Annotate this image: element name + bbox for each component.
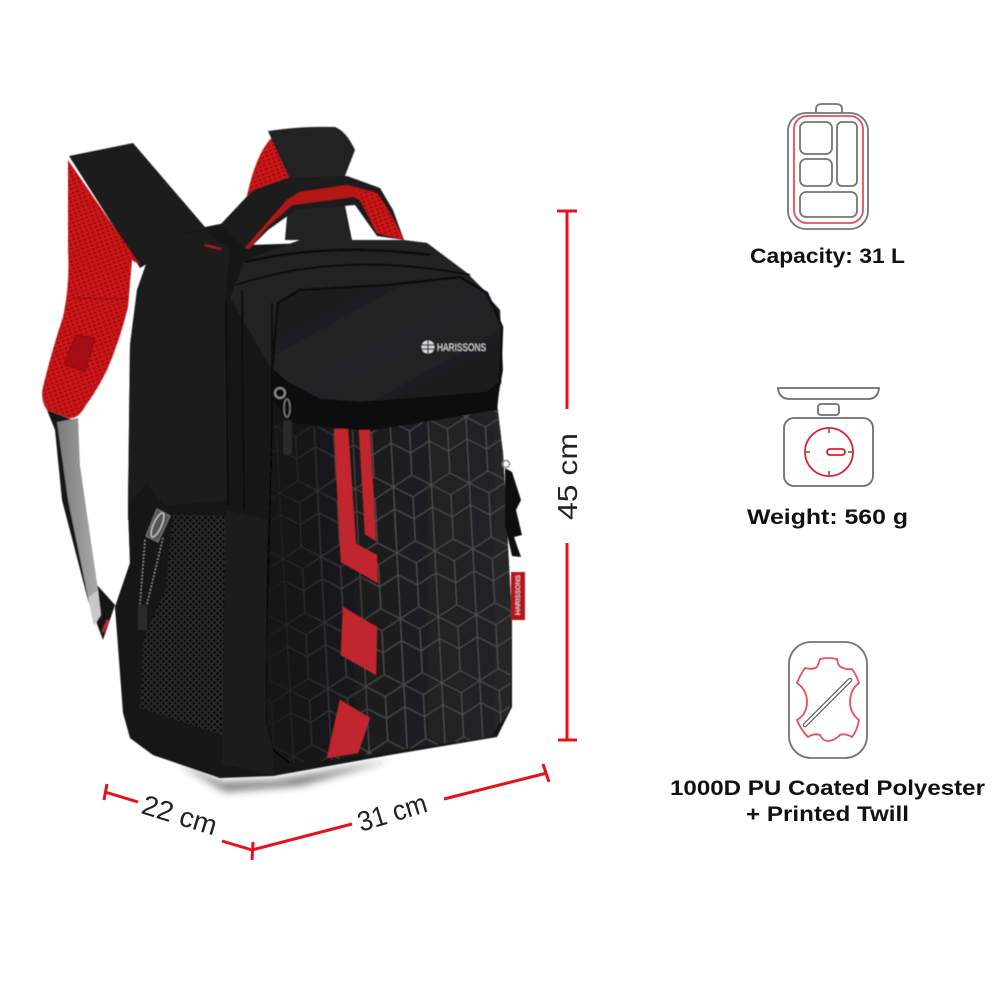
- side lower panel: [222, 510, 275, 776]
- printed front panel: [266, 405, 512, 763]
- red side tag: HARISSONS: [516, 575, 522, 615]
- ground shadow: [175, 760, 392, 792]
- red side tag: [511, 572, 525, 620]
- brand logo: [421, 340, 486, 354]
- icon: backpack compartments: [788, 104, 868, 229]
- webbing strap: [47, 410, 115, 640]
- feature: weight: [747, 388, 908, 529]
- front zipper pull: [275, 388, 292, 455]
- back strap, right side: [245, 127, 355, 240]
- side zipper pulls: [502, 460, 522, 557]
- dimension: width 31 cm: [252, 764, 549, 860]
- side loop tag: [138, 509, 170, 630]
- label: weight: Weight: 560 g: [747, 506, 908, 529]
- side mesh pocket: [115, 483, 228, 735]
- side panel ribbed fabric: [128, 230, 230, 507]
- feature: material: [670, 642, 985, 826]
- front top pocket: [272, 277, 502, 403]
- dimension: height 45 cm: 45 cm: [552, 433, 583, 520]
- label: material: [670, 777, 985, 826]
- red side accent: [103, 620, 108, 632]
- label: capacity: Capacity: 31 L: [750, 245, 905, 268]
- brand logo: HARISSONS: [437, 342, 486, 354]
- left shoulder strap: [42, 143, 205, 418]
- dimension: height 45 cm: [552, 211, 583, 740]
- label: material: + Printed Twill: [746, 803, 909, 826]
- dimension: width 31 cm: 31 cm: [354, 787, 431, 838]
- backpack photo: [42, 127, 525, 792]
- top gusset: [205, 240, 487, 510]
- icon: leather hide: [789, 642, 867, 758]
- icon: weighing scale: [778, 388, 879, 486]
- main bag body: [115, 223, 512, 778]
- label: material: 1000D PU Coated Polyester: [670, 777, 985, 800]
- red stripes: [327, 429, 378, 758]
- zipper band: [272, 370, 500, 431]
- dimension: depth 22 cm: [104, 784, 252, 850]
- feature: capacity: [750, 104, 905, 268]
- dimension: depth 22 cm: 22 cm: [138, 789, 221, 841]
- carry handle: [220, 176, 404, 250]
